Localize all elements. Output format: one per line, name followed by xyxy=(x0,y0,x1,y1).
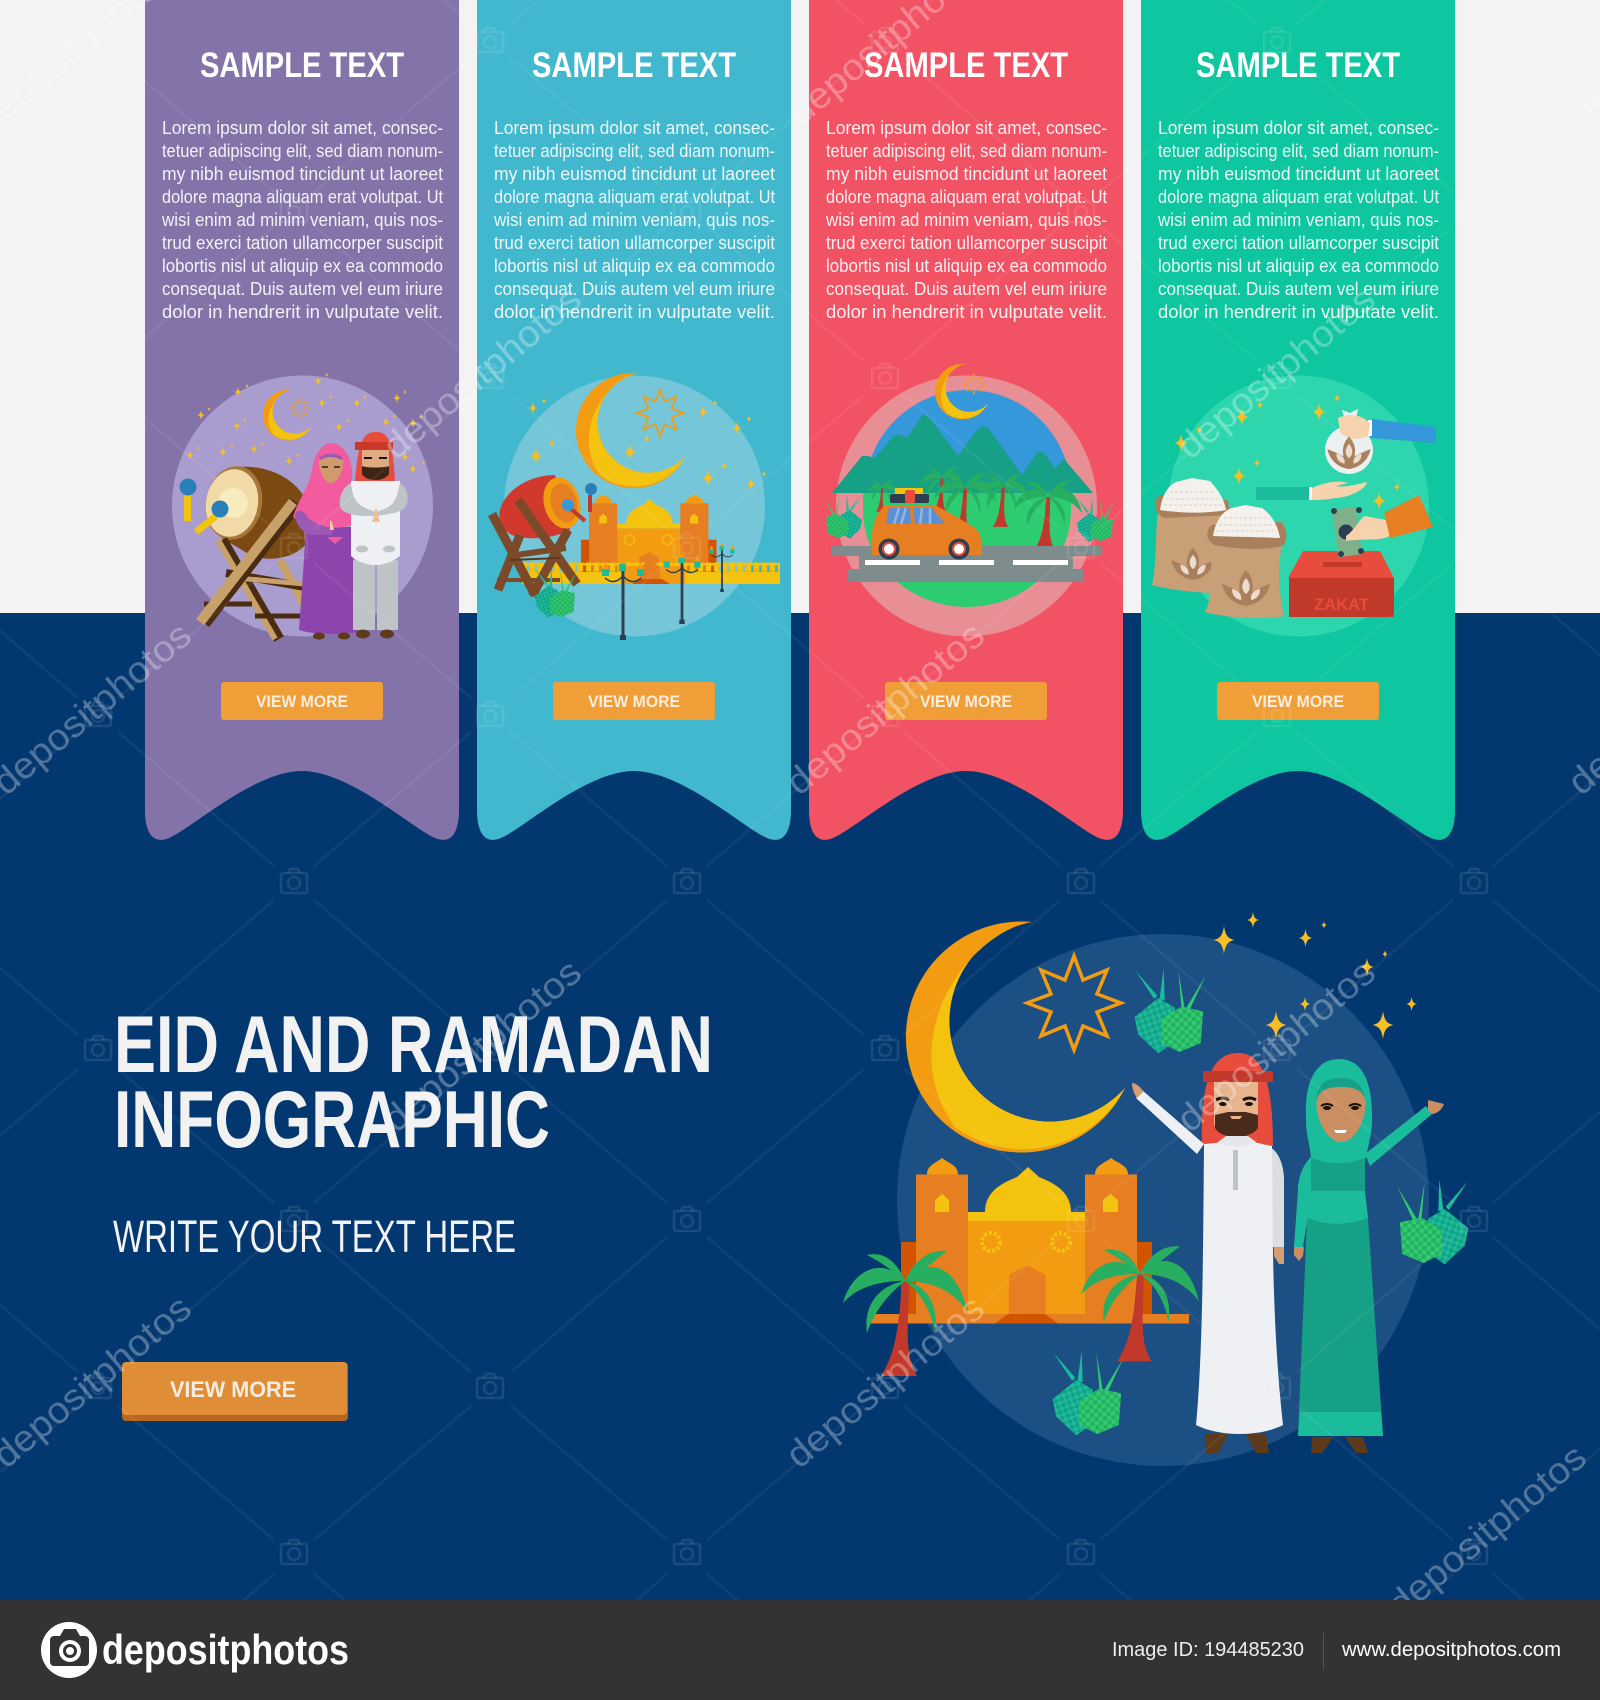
panel 2 body text: lobortis nisl ut aliquip ex ea commodo xyxy=(494,255,775,276)
depositphotos watermarks: depositphotos xyxy=(1380,1436,1594,1625)
background: light upper area xyxy=(0,0,1600,613)
depositphotos watermarks: depositphotos xyxy=(1169,951,1383,1140)
circle backdrop xyxy=(897,934,1429,1466)
panel 3 illustration: car on road with mountains xyxy=(825,364,1114,636)
panel 3 button: VIEW MORE xyxy=(920,692,1012,711)
crescent moon xyxy=(906,922,1125,1153)
panel 2 body text: my nibh euismod tincidunt ut laoreet xyxy=(494,163,775,184)
man in red headdress xyxy=(340,432,408,638)
left rice sack xyxy=(1152,478,1230,593)
hand with donation bag xyxy=(1325,409,1436,474)
palm trees xyxy=(866,467,1082,549)
main illustration: couple, mosque and crescent xyxy=(843,912,1468,1466)
panel 2 body text: dolore magna aliquam erat volutpat. Ut xyxy=(494,186,775,207)
panel 2 illustration: mosque, drum and lamps xyxy=(492,373,780,640)
panel 3 body text xyxy=(825,117,1107,322)
panel 2 background xyxy=(477,0,791,840)
panel 4 body text: wisi enim ad minim veniam, quis nos- xyxy=(1157,209,1439,230)
circle backdrop xyxy=(504,376,765,636)
watermark camera icons xyxy=(85,28,1487,1564)
ketupat xyxy=(535,568,576,617)
panel 3 body text: dolor in hendrerit in vulputate velit. xyxy=(826,301,1107,322)
panel 4 body text: my nibh euismod tincidunt ut laoreet xyxy=(1158,163,1439,184)
ketupat left and right xyxy=(825,494,1114,541)
panel 3 background xyxy=(809,0,1123,840)
panel 1 button: VIEW MORE xyxy=(256,692,348,711)
panel 3 button xyxy=(885,682,1047,720)
orange car xyxy=(872,488,982,560)
panel 3 body text: trud exerci tation ullamcorper suscipit xyxy=(826,232,1107,253)
panel 2 body text: tetuer adipiscing elit, sed diam nonum- xyxy=(494,140,775,161)
panel 1: purple banner xyxy=(145,0,459,840)
stars xyxy=(1174,394,1400,510)
stars xyxy=(528,398,767,490)
mosque xyxy=(564,494,736,584)
hand inserting banknote xyxy=(1331,495,1433,557)
panel 1 button xyxy=(221,682,383,720)
ketupat right xyxy=(1397,1179,1468,1262)
panel 2 body text: Lorem ipsum dolor sit amet, consec- xyxy=(494,117,775,138)
panel 1 heading: SAMPLE TEXT xyxy=(200,46,404,85)
circle backdrop xyxy=(172,376,433,636)
panel 1 body text: my nibh euismod tincidunt ut laoreet xyxy=(162,163,443,184)
main button xyxy=(122,1362,348,1421)
background: navy lower area xyxy=(0,613,1600,1600)
man in white robe xyxy=(1132,1053,1284,1453)
subtitle: WRITE YOUR TEXT HERE xyxy=(113,1211,516,1262)
panel 4 button: VIEW MORE xyxy=(1252,692,1344,711)
road xyxy=(831,546,1102,582)
yellow fence xyxy=(522,558,780,584)
panel 3 body text: lobortis nisl ut aliquip ex ea commodo xyxy=(826,255,1107,276)
panel 4 body text: tetuer adipiscing elit, sed diam nonum- xyxy=(1158,140,1439,161)
scattered stars xyxy=(186,372,425,474)
mosque xyxy=(870,1158,1189,1324)
circle backdrop xyxy=(836,376,1097,636)
panel 3 heading: SAMPLE TEXT xyxy=(864,46,1068,85)
sky and meadow disc xyxy=(863,390,1071,607)
footer divider xyxy=(1323,1633,1324,1670)
panel 1 body text: dolor in hendrerit in vulputate velit. xyxy=(162,301,443,322)
panel 3 body text: Lorem ipsum dolor sit amet, consec- xyxy=(826,117,1107,138)
panel 3 body text: my nibh euismod tincidunt ut laoreet xyxy=(826,163,1107,184)
panel 4 button xyxy=(1217,682,1379,720)
main title: EID AND RAMADAN xyxy=(114,1000,713,1090)
right rice sack xyxy=(1205,505,1286,618)
crescent moon and star xyxy=(263,390,311,441)
panel 1 body text: trud exerci tation ullamcorper suscipit xyxy=(162,232,443,253)
panel 1 body text: dolore magna aliquam erat volutpat. Ut xyxy=(162,186,443,207)
footer bar xyxy=(0,1600,1600,1700)
panel 4 body text: dolor in hendrerit in vulputate velit. xyxy=(1158,301,1439,322)
panel 1 body text: lobortis nisl ut aliquip ex ea commodo xyxy=(162,255,443,276)
panel 4 body text: dolore magna aliquam erat volutpat. Ut xyxy=(1158,186,1439,207)
panel 2 body text: wisi enim ad minim veniam, quis nos- xyxy=(493,209,775,230)
panel 1 body text: consequat. Duis autem vel eum iriure xyxy=(162,278,443,299)
panel 3 body text: wisi enim ad minim veniam, quis nos- xyxy=(825,209,1107,230)
panel 3: red banner xyxy=(809,0,1123,840)
panel 4 body text: lobortis nisl ut aliquip ex ea commodo xyxy=(1158,255,1439,276)
panel 4 body text: Lorem ipsum dolor sit amet, consec- xyxy=(1158,117,1439,138)
panel 2: teal banner xyxy=(477,0,791,840)
panel 1 body text xyxy=(161,117,443,322)
mountains xyxy=(832,414,1093,493)
panel 2 button: VIEW MORE xyxy=(588,692,680,711)
footer url: www.depositphotos.com xyxy=(1341,1639,1561,1661)
panel 3 body text: consequat. Duis autem vel eum iriure xyxy=(826,278,1107,299)
depositphotos watermarks: depositphotos xyxy=(778,614,992,803)
panel 2 body text: trud exerci tation ullamcorper suscipit xyxy=(494,232,775,253)
panel 1 body text: wisi enim ad minim veniam, quis nos- xyxy=(161,209,443,230)
left palm xyxy=(843,1251,967,1376)
ketupat bottom xyxy=(1053,1350,1124,1433)
main title: INFOGRAPHIC xyxy=(114,1075,550,1165)
main title xyxy=(114,1000,713,1165)
image id: Image ID: 194485230 xyxy=(1112,1639,1304,1661)
panel 1 background xyxy=(145,0,459,840)
panel 4 heading: SAMPLE TEXT xyxy=(1196,46,1400,85)
crescent moon and star xyxy=(935,364,988,419)
panel 2 body text: dolor in hendrerit in vulputate velit. xyxy=(494,301,775,322)
panel 2 body text: consequat. Duis autem vel eum iriure xyxy=(494,278,775,299)
panel 2 heading: SAMPLE TEXT xyxy=(532,46,736,85)
woman in green dress xyxy=(1294,1059,1444,1453)
panel 3 body text: tetuer adipiscing elit, sed diam nonum- xyxy=(826,140,1107,161)
circle backdrop xyxy=(1168,376,1429,636)
woman in pink hijab xyxy=(293,443,358,640)
zakat box xyxy=(1288,551,1394,617)
right palm xyxy=(1081,1246,1199,1361)
ketupat top xyxy=(1135,968,1206,1051)
panel 2 button xyxy=(553,682,715,720)
receiving hand xyxy=(1256,482,1367,500)
box label: ZAKAT xyxy=(1314,595,1370,614)
panel 4 background xyxy=(1141,0,1455,840)
depositphotos watermarks: depositphotos xyxy=(375,951,589,1140)
panel 4 body text: trud exerci tation ullamcorper suscipit xyxy=(1158,232,1439,253)
depositphotos watermarks: depositphotos xyxy=(1169,278,1383,467)
stars xyxy=(1214,912,1417,1039)
bedug drum on stand xyxy=(200,462,305,639)
red drum on wooden stand xyxy=(492,473,597,596)
street lamps xyxy=(602,542,735,640)
main button: VIEW MORE xyxy=(170,1377,296,1402)
panel 3 body text: dolore magna aliquam erat volutpat. Ut xyxy=(826,186,1107,207)
panel 2 body text xyxy=(493,117,775,322)
drum mallets xyxy=(180,478,228,532)
panel 1 illustration: drum and couple xyxy=(172,372,433,640)
panel 4 body text xyxy=(1157,117,1439,322)
eight-point star xyxy=(1027,956,1121,1050)
panel 4: green banner xyxy=(1141,0,1455,840)
panel 4 illustration: zakat giving xyxy=(1152,376,1436,636)
depositphotos watermarks: depositphotos xyxy=(375,278,589,467)
panel 4 body text: consequat. Duis autem vel eum iriure xyxy=(1158,278,1439,299)
footer logo mark xyxy=(41,1622,97,1678)
footer wordmark: depositphotos xyxy=(102,1626,349,1673)
panel 1 body text: Lorem ipsum dolor sit amet, consec- xyxy=(162,117,443,138)
crescent moon and star xyxy=(576,373,686,488)
panel 1 body text: tetuer adipiscing elit, sed diam nonum- xyxy=(162,140,443,161)
depositphotos watermarks: depositphotos xyxy=(778,1287,992,1476)
